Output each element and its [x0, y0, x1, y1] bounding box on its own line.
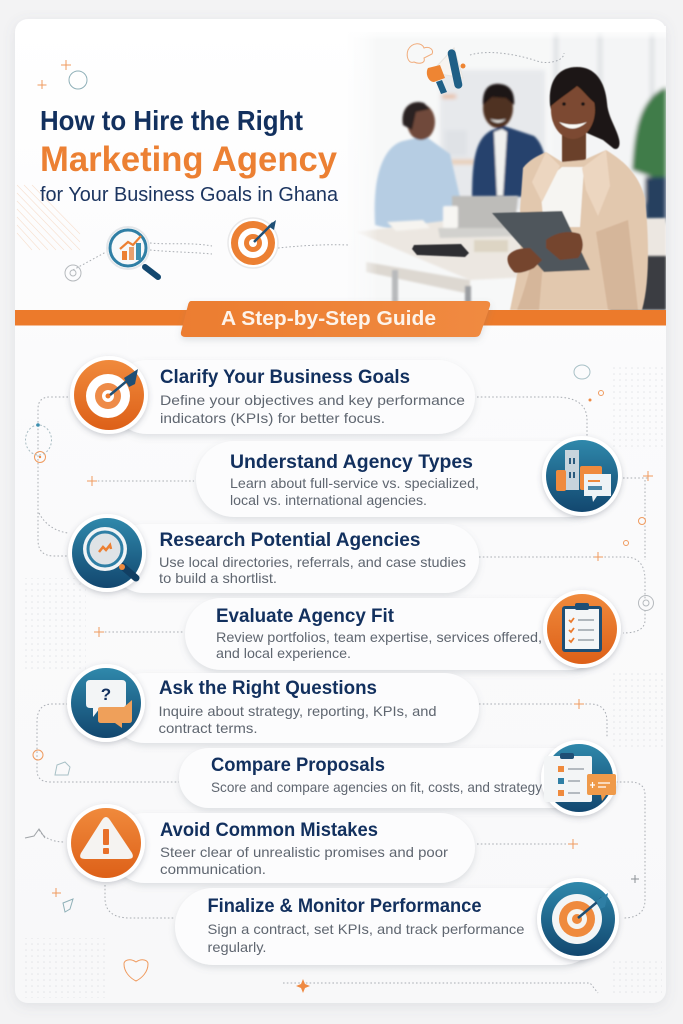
sparkles and leaf, top left — [38, 60, 87, 89]
photo: team meeting — [340, 32, 666, 310]
guide tag — [181, 301, 490, 337]
step 7 text: Steer clear of unrealistic promises and poor — [160, 844, 448, 860]
step 3 text — [159, 530, 466, 586]
step 3 icon: magnifier — [68, 514, 146, 592]
man in navy suit — [472, 84, 550, 198]
step 6: compare — [179, 740, 617, 816]
megaphone icon — [427, 48, 466, 94]
icon: magnifier with chart — [65, 227, 212, 281]
man in light blue shirt — [374, 102, 462, 229]
step 5 text: Inquire about strategy, reporting, KPIs, and — [158, 703, 436, 719]
dotted corner patterns — [24, 364, 664, 998]
step 3: research — [68, 514, 479, 593]
step 4 text: and local experience. — [216, 645, 351, 661]
title: for Your Business Goals in Ghana — [40, 184, 339, 206]
table and laptop — [356, 196, 666, 310]
guide tag: A Step-by-Step Guide — [221, 308, 436, 330]
step 6 icon: checklist with tag — [541, 740, 617, 816]
step 7 text: communication. — [160, 861, 266, 877]
step 4 pill — [185, 598, 605, 670]
orange banner strip — [15, 310, 666, 326]
step 2 text — [230, 452, 479, 508]
phone on table — [412, 244, 469, 257]
step 7 icon: warning — [67, 804, 145, 882]
step 4 text: Review portfolios, team expertise, services offered, — [216, 629, 542, 645]
step 8 text: Finalize & Monitor Performance — [208, 896, 482, 917]
step 1 icon: target — [70, 356, 148, 434]
step 8: finalize — [175, 878, 619, 965]
step 1 pill — [110, 360, 475, 434]
step 5 icon: speech bubbles: ? — [101, 685, 111, 704]
connector paths — [37, 397, 648, 993]
step 2 pill — [196, 441, 606, 517]
step 3 text: to build a shortlist. — [159, 570, 277, 586]
step 1 text — [160, 367, 465, 426]
title: How to Hire the Right — [40, 105, 303, 136]
step 4 text: Evaluate Agency Fit — [216, 606, 395, 627]
step 2 text: Understand Agency Types — [230, 452, 473, 473]
step 2: agency types — [196, 436, 622, 517]
step 2 text: Learn about full-service vs. specialized, — [230, 475, 479, 491]
step 4 text — [216, 606, 542, 661]
step 5 text — [158, 678, 436, 736]
step 7 pill — [110, 813, 475, 883]
step 5 text: contract terms. — [158, 720, 258, 736]
title — [40, 105, 339, 206]
step 5 pill — [110, 673, 479, 743]
step 5: questions — [67, 664, 479, 743]
step 2 icon: buildings — [542, 436, 622, 516]
step 6 text: Compare Proposals — [211, 755, 385, 776]
step 4 icon: clipboard — [543, 590, 621, 668]
step 5 text: Ask the Right Questions — [159, 678, 377, 699]
hatch decoration — [17, 185, 80, 250]
step 1 text: Define your objectives and key performance — [160, 392, 465, 408]
step 7 text: Avoid Common Mistakes — [160, 820, 378, 841]
step 8 text: regularly. — [208, 939, 266, 955]
step 1: clarify goals — [70, 356, 475, 434]
step 8 icon: target — [537, 878, 619, 960]
step 8 text: Sign a contract, set KPIs, and track performance — [208, 921, 525, 937]
small decorations — [25, 365, 654, 993]
step 3 text: Research Potential Agencies — [160, 530, 420, 551]
step 8 pill — [175, 888, 600, 965]
step 8 text — [208, 896, 525, 955]
step 6 pill — [179, 748, 599, 808]
step 6 text — [211, 755, 542, 795]
woman with clipboard — [492, 67, 648, 310]
step 3 pill — [110, 524, 479, 593]
step 4: evaluate fit — [185, 590, 621, 670]
step 7 text — [160, 820, 448, 877]
step 1 text: Clarify Your Business Goals — [160, 367, 410, 388]
title: Marketing Agency — [40, 140, 338, 179]
step 2 text: local vs. international agencies. — [230, 492, 427, 508]
step 1 text: indicators (KPIs) for better focus. — [160, 410, 385, 426]
step 6 text: Score and compare agencies on fit, costs, and strategy — [211, 779, 542, 795]
step 7: mistakes — [67, 804, 475, 883]
step 5 icon: speech bubbles — [67, 664, 145, 742]
top fade over photo — [345, 26, 666, 40]
step 3 text: Use local directories, referrals, and case studies — [159, 554, 466, 570]
decorative outline leaf and path near megaphone — [407, 44, 564, 63]
icon: target — [228, 218, 348, 268]
